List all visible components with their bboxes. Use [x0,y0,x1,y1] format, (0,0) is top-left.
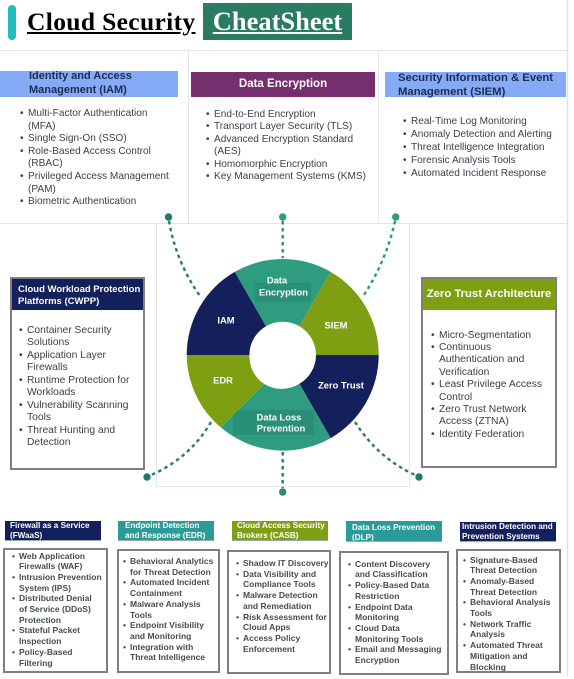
items: FWaaS: Stateful Packet [19,625,80,635]
items: FWaaS: Web Application [19,550,85,560]
list: IAM items: Biometric Authentication [28,196,136,207]
items: CASB: Risk Assessment for [243,612,327,622]
heading: Data Encryption [191,72,375,97]
heading: CWPP: Platforms (CWPP) [18,296,99,307]
list: Data Encryption items: (AES) [214,146,241,157]
list: Zero Trust items: Verification [439,367,489,378]
list: Data Encryption items: Homomorphic Encryption [214,159,327,170]
list: SIEM items [403,116,552,179]
items: FWaaS: Policy-Based [19,647,72,657]
items: IDPS: Threat Detection [470,565,537,575]
items: FWaaS: Intrusion Prevention [19,572,102,582]
items: FWaaS [12,550,102,668]
items: FWaaS: System (IPS) [19,583,71,593]
items: IDPS [463,554,550,672]
heading: CASB [232,521,328,541]
list: CWPP items: Threat Hunting and [27,424,115,436]
heading: SIEM [385,72,566,97]
list: IAM items: (PAM) [28,184,56,195]
heading: Data Encryption: Data Encryption [239,78,327,90]
items: FWaaS: Distributed Denial [19,593,92,603]
list: Data Encryption items: Advanced Encryption Standard [214,134,353,145]
items: DLP: Policy-Based Data [355,580,429,590]
items: FWaaS: Protection [19,615,61,625]
items: CASB: Shadow IT Discovery [243,558,328,568]
segment: EDR [187,355,264,427]
items: EDR: Endpoint Visibility [130,620,204,630]
panel: EDR [117,521,220,673]
items: IDPS: Blocking [470,662,506,672]
segment: IAM [187,272,266,355]
title: Cloud Security: Cloud Security [27,7,196,36]
heading: IAM: Identity and Access [29,70,132,82]
list: Zero Trust items: Continuous [439,342,491,353]
list: Zero Trust items: Micro-Segmentation [439,330,531,340]
panel: CWPP [10,277,145,470]
list: CWPP items: Tools [27,412,51,423]
panel: Identity and Access Management [0,70,178,207]
items: IDPS: Behavioral Analysis [470,597,550,607]
items: DLP: Restriction [355,591,399,601]
segment: Data Encryption: Encryption [259,286,308,298]
list: Data Encryption items: End-to-End Encryption [214,108,316,120]
list: CWPP items: Detection [27,437,71,448]
items: CASB: and Remediation [243,601,311,611]
panel: DLP [339,521,449,675]
items: IDPS: Tools [470,608,492,618]
segment: Data Encryption: Data [267,274,288,286]
items: IDPS: Mitigation and [470,651,528,661]
list: CWPP items: Runtime Protection for [27,374,129,386]
segment: Zero Trust: Zero Trust [318,380,364,390]
items: IDPS: Signature-Based [470,554,538,564]
items: EDR: Tools [130,610,152,620]
connectors: dashed curves and dots [143,213,423,496]
items: DLP: Endpoint Data [355,602,413,612]
heading: DLP: (DLP) [352,533,374,542]
segment: Zero Trust [299,355,379,438]
list: SIEM items: Anomaly Detection and Alerting [411,129,552,140]
list: IAM items: Role-Based Access Control [28,146,151,157]
items: CASB: Enforcement [243,644,295,654]
items: DLP: and Classification [355,569,428,579]
heading: CASB: Brokers (CASB) [237,531,298,540]
list: IAM items: Privileged Access Management [28,171,169,182]
heading: CWPP: Cloud Workload Protection [18,284,140,295]
list: SIEM items: Real-Time Log Monitoring [411,116,527,127]
segment: IAM: IAM [217,314,235,326]
title badge: CheatSheet: CheatSheet [213,6,342,36]
list box: DLP [339,551,449,675]
list box: EDR [117,549,220,673]
items: FWaaS: Filtering [19,658,53,668]
items: DLP: Monitoring Tools [355,634,423,644]
items: DLP [348,559,441,665]
segment: EDR: EDR [213,374,233,386]
items: EDR: Integration with [130,642,193,652]
panel: Zero Trust Architecture [421,277,557,468]
list: IAM items: Multi-Factor Authentication [28,108,148,119]
items: DLP: Cloud Data [355,623,400,633]
list: SIEM items: Threat Intelligence Integration [411,142,545,153]
items: IDPS: Analysis [470,629,505,639]
list: Zero Trust items: Access (ZTNA) [439,416,509,427]
heading: SIEM: Security Information & Event [398,72,553,84]
list: SIEM items: Automated Incident Response [411,168,546,179]
heading: EDR [118,521,214,541]
heading: FWaaS [5,521,101,541]
items: EDR: for Threat Detection [130,567,211,577]
list: Zero Trust items: Authentication and [439,354,524,365]
heading: FWaaS: (FWaaS) [10,531,42,540]
heading: IAM [0,71,178,97]
list: SIEM items: Forensic Analysis Tools [411,155,516,166]
list: IAM items [20,108,169,207]
panel: FWaaS [3,521,108,673]
heading: SIEM: Management (SIEM) [398,86,505,98]
items: IDPS: Anomaly-Based [470,576,534,586]
panel: CASB [227,521,331,674]
heading: Zero Trust [423,279,555,310]
items: EDR: Malware Analysis [130,599,201,609]
panel: SIEM [385,72,566,179]
items: CASB: Malware Detection [243,590,318,600]
panel: Data Encryption [191,72,375,182]
segment: Data Loss Prevention: Data Loss [257,412,301,422]
list: CWPP items: Application Layer [27,350,106,360]
items: DLP: Encryption [355,655,399,665]
items: FWaaS: Firewalls (WAF) [19,561,82,571]
list: Data Encryption items: Key Management Systems (KMS) [214,171,366,182]
heading: IDPS [460,522,556,542]
panel: IDPS [456,522,561,673]
heading: DLP [346,521,442,542]
items: EDR: Behavioral Analytics [130,556,213,566]
segment: SIEM [299,272,379,355]
items: DLP: Content Discovery [355,559,430,569]
list: CWPP items: Firewalls [27,362,68,373]
list: CWPP items: Container Security [27,324,112,336]
items: EDR [123,556,213,662]
list: CWPP items: Workloads [27,387,75,398]
list: IAM items: (RBAC) [28,158,63,169]
list: Zero Trust items: Control [439,392,472,403]
title accent pill [8,5,16,40]
list box: CASB [227,550,331,674]
list: Data Encryption items [206,108,366,182]
segment: SIEM: SIEM [325,320,348,330]
list: Zero Trust items: Least Privilege Access [439,379,542,390]
items: CASB: Cloud Apps [243,622,290,632]
items: FWaaS: of Service (DDoS) [19,604,91,614]
heading: CWPP [12,279,143,310]
items: EDR: and Monitoring [130,631,191,641]
items: EDR: Threat Intelligence [130,652,205,662]
heading: Zero Trust: Zero Trust Architecture [427,288,551,300]
heading: EDR: and Response (EDR) [125,531,205,540]
items: EDR: Automated Incident [130,577,209,587]
segment: Data Loss Prevention: Prevention [257,422,305,434]
items: CASB: Data Visibility and [243,569,316,579]
heading: IAM: Management (IAM) [29,84,127,96]
heading: IDPS: Prevention Systems [462,532,540,541]
heading: CASB: Cloud Access Security [237,521,325,530]
list: Zero Trust items [431,330,542,440]
heading: DLP: Data Loss Prevention [352,523,435,532]
segment: Data Loss Prevention [221,384,331,451]
items: DLP: Monitoring [355,612,399,622]
list: CWPP items [19,324,130,448]
items: IDPS: Automated Threat [470,640,543,650]
heading: FWaaS: Firewall as a Service [10,521,90,530]
items: CASB: Compliance Tools [243,579,316,589]
heading: EDR: Endpoint Detection [125,521,199,530]
items: FWaaS: Inspection [19,636,62,646]
items: IDPS: Threat Detection [470,587,537,597]
list: IAM items: Single Sign-On (SSO) [28,133,127,144]
items: CASB [236,558,328,654]
list: CWPP items: Solutions [27,337,69,348]
list box: IDPS [456,549,561,673]
items: EDR: Containment [130,588,182,598]
items: IDPS: Network Traffic [470,619,531,629]
list: Zero Trust items: Identity Federation [439,429,524,440]
segment: Data Encryption [235,259,331,326]
list: Data Encryption items: Transport Layer Security (TLS) [214,121,352,132]
items: DLP: Email and Messaging [355,644,441,654]
list: IAM items: (MFA) [28,121,55,132]
list: Zero Trust items: Zero Trust Network [439,404,527,415]
heading: IDPS: Intrusion Detection and [462,522,553,531]
list box: FWaaS [3,548,108,673]
items: CASB: Access Policy [243,633,300,643]
list: CWPP items: Vulnerability Scanning [27,400,129,410]
